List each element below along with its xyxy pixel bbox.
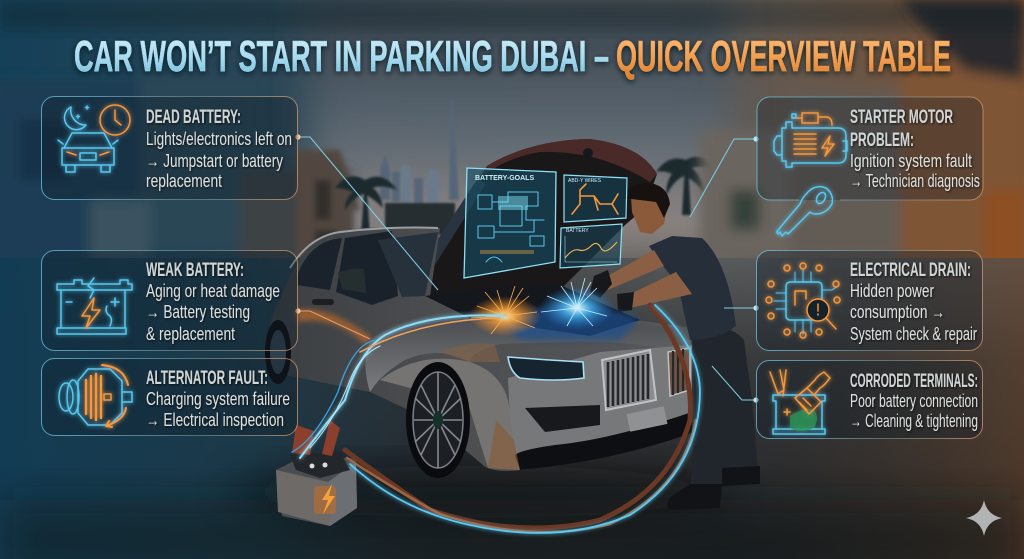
- icon: sparkle watermark: [966, 500, 1002, 536]
- side windows: [297, 238, 342, 290]
- description: Ignition system fault: [850, 151, 972, 171]
- side mirror: [338, 268, 366, 293]
- arm upper: [604, 250, 664, 290]
- icon: alternator: [59, 365, 132, 427]
- roof highlight: [290, 228, 438, 268]
- open bonnet lid: [400, 139, 657, 300]
- screen: battery schematic: BATTERY-GOALS: [475, 175, 534, 182]
- engine sparks: [469, 278, 640, 340]
- boots: [722, 466, 760, 486]
- screen: battery schematic: [464, 168, 556, 278]
- screen: line chart: BATTERY: [566, 228, 589, 234]
- icon: car key: [777, 187, 832, 236]
- screen: line chart: [560, 224, 622, 268]
- hair: [622, 183, 670, 218]
- panel: dead battery: [42, 96, 298, 200]
- description: consumption →: [850, 302, 945, 322]
- description: [146, 129, 292, 191]
- heading: DEAD BATTERY:: [146, 107, 241, 128]
- heading: [850, 107, 953, 151]
- screen: orange circuit: [564, 175, 627, 222]
- description: [850, 391, 978, 431]
- front fender and hood: [365, 313, 692, 392]
- head: [631, 187, 668, 234]
- heading: ALTERNATOR FAULT:: [146, 368, 268, 389]
- icon: cracked battery: [57, 278, 132, 334]
- description: Lights/electronics left on: [146, 129, 292, 149]
- leader lines from panels to car: [295, 134, 759, 403]
- trousers: [690, 328, 758, 490]
- panel: starter motor problem: [757, 97, 983, 236]
- title part: blue: CAR WON’T START IN PARKING DUBAI –: [74, 32, 609, 81]
- description: [146, 389, 290, 430]
- description: → Electrical inspection: [146, 410, 284, 430]
- description: [850, 151, 980, 191]
- description: [146, 281, 280, 344]
- jumper cables and electric arcs: [292, 305, 700, 533]
- headlight: [508, 357, 584, 380]
- title: [74, 32, 951, 81]
- description: → Battery testing: [146, 302, 250, 322]
- panel: alternator fault: [42, 358, 298, 436]
- icon: corroded battery with brush: [770, 370, 830, 434]
- grille: [602, 348, 690, 432]
- screen: orange circuit: ABD-Y WIRES: [568, 178, 602, 184]
- description: Charging system failure: [146, 389, 290, 409]
- panel: corroded terminals: [756, 360, 982, 438]
- heading: STARTER MOTOR: [850, 107, 953, 128]
- car body side: [267, 227, 692, 471]
- left buildings: [0, 75, 350, 290]
- description: Aging or heat damage: [146, 281, 280, 301]
- ground: [0, 258, 1024, 559]
- heading: PROBLEM:: [850, 130, 914, 151]
- icon: starter motor: [774, 113, 847, 167]
- engine glow: [500, 305, 640, 340]
- description: [850, 281, 977, 344]
- technician repairing the engine: [590, 183, 760, 510]
- rear wheel: [265, 320, 291, 384]
- orange side reflection: [296, 309, 372, 345]
- description: Hidden power: [850, 281, 934, 301]
- portable jump starter: [276, 420, 357, 526]
- description: → Jumpstart or battery: [146, 151, 283, 171]
- heading: WEAK BATTERY:: [146, 260, 244, 281]
- right buildings: [700, 0, 1024, 310]
- panel: weak battery: [42, 250, 298, 350]
- tan building near the car: [296, 150, 360, 280]
- description: replacement: [146, 171, 222, 191]
- engine bay: [425, 285, 640, 336]
- gloves: [590, 270, 612, 298]
- shirt: [649, 236, 736, 340]
- Dubai skyline: [380, 100, 459, 208]
- holographic diagnostic screens: [464, 168, 627, 278]
- luxury car: [265, 227, 692, 478]
- icon: car at night with clock: [58, 105, 130, 172]
- palm trees: [335, 157, 720, 235]
- icon: chip with magnifier: [766, 263, 840, 338]
- front wheel: [406, 362, 470, 478]
- door handle: [312, 299, 334, 305]
- panel: electrical drain: [756, 250, 982, 350]
- description: & replacement: [146, 324, 235, 344]
- front bumper: [508, 345, 692, 470]
